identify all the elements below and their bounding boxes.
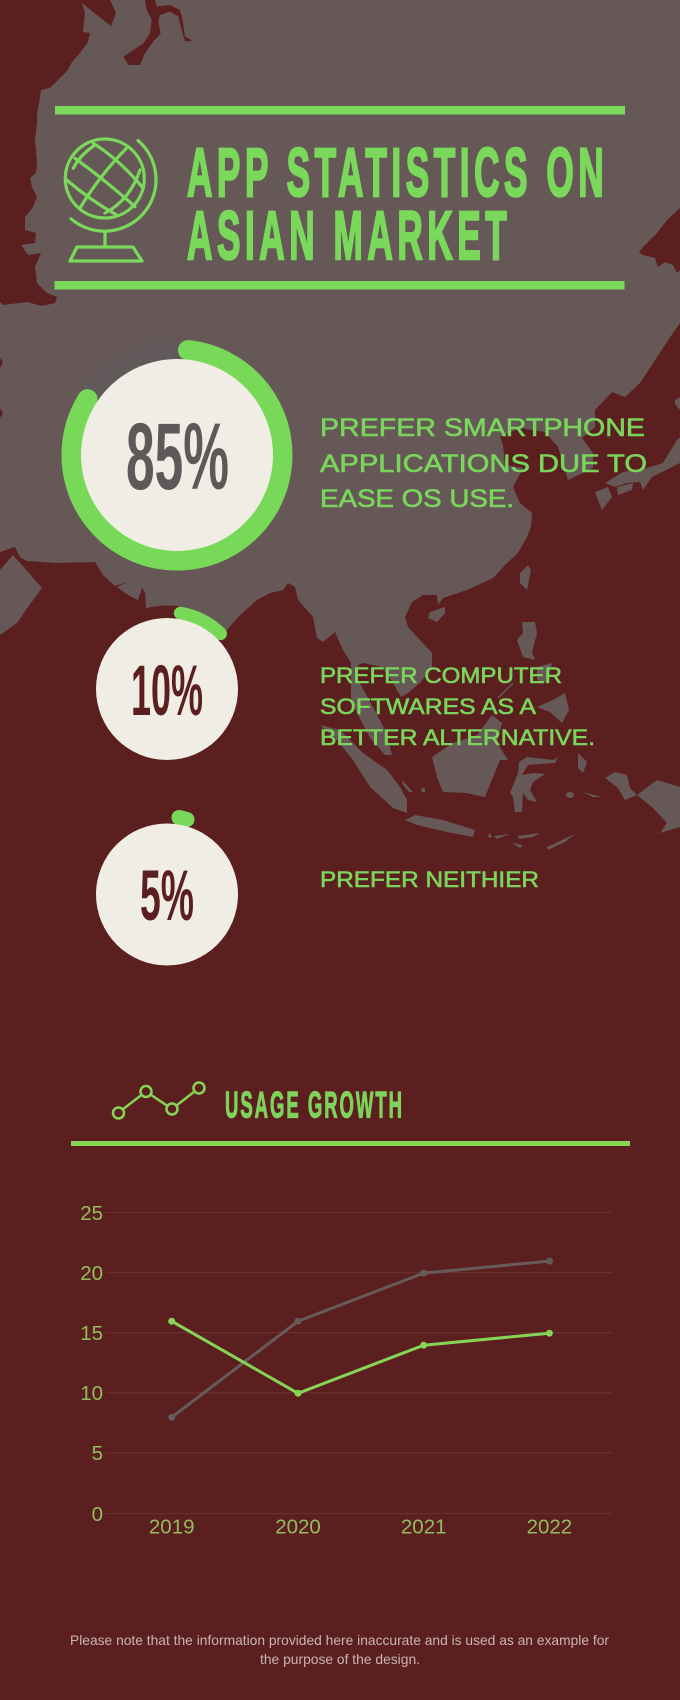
x axis labels: 2020 <box>275 1516 321 1538</box>
x axis labels: 2022 <box>527 1516 572 1538</box>
icon: line trend <box>113 1082 204 1118</box>
text: 10% description: BETTER ALTERNATIVE. <box>320 725 595 750</box>
y axis labels <box>80 1202 103 1526</box>
title: ASIAN MARKET <box>187 196 507 274</box>
stat: 5%: 5% <box>140 857 194 936</box>
y axis labels: 0 <box>92 1503 103 1526</box>
heading: usage growth: USAGE GROWTH <box>225 1086 402 1126</box>
stat: 10% <box>90 612 244 766</box>
icon: globe <box>65 139 156 261</box>
y axis labels: 5 <box>92 1442 103 1465</box>
text: 85% description: APPLICATIONS DUE TO <box>320 450 647 478</box>
stat: 5% <box>96 818 238 966</box>
line chart <box>80 1202 612 1538</box>
title <box>187 133 604 274</box>
y axis labels: 25 <box>80 1202 103 1225</box>
text: 10% description: SOFTWARES AS A <box>320 694 536 719</box>
y axis labels: 20 <box>80 1262 103 1285</box>
stat: 85% <box>71 350 283 561</box>
dark seas over map <box>0 0 193 418</box>
header rule top <box>55 106 625 114</box>
series: green <box>168 1318 553 1397</box>
text: 5% description: PREFER NEITHIER <box>320 867 539 892</box>
stat: 10%: 10% <box>131 652 203 731</box>
title: APP STATISTICS ON <box>187 133 604 211</box>
x axis labels: 2021 <box>401 1516 447 1538</box>
text: 10% description <box>320 663 595 750</box>
y axis labels: 10 <box>80 1382 103 1405</box>
footnote: Please note that the information provided here inaccurate and is used as an example for <box>70 1632 609 1648</box>
stat: 85%: 85% <box>126 404 229 510</box>
text: 85% description <box>320 414 647 513</box>
section rule <box>71 1141 630 1146</box>
series: gray <box>168 1258 553 1421</box>
text: 10% description: PREFER COMPUTER <box>320 663 562 688</box>
text: 85% description: PREFER SMARTPHONE <box>320 414 645 442</box>
header rule bottom <box>54 281 624 290</box>
x axis labels <box>149 1516 572 1538</box>
y axis labels: 15 <box>80 1322 103 1345</box>
footnote: the purpose of the design. <box>260 1651 420 1667</box>
footnote <box>70 1632 609 1667</box>
text: 85% description: EASE OS USE. <box>320 485 514 513</box>
x axis labels: 2019 <box>149 1516 195 1538</box>
map of Asia <box>0 0 680 850</box>
